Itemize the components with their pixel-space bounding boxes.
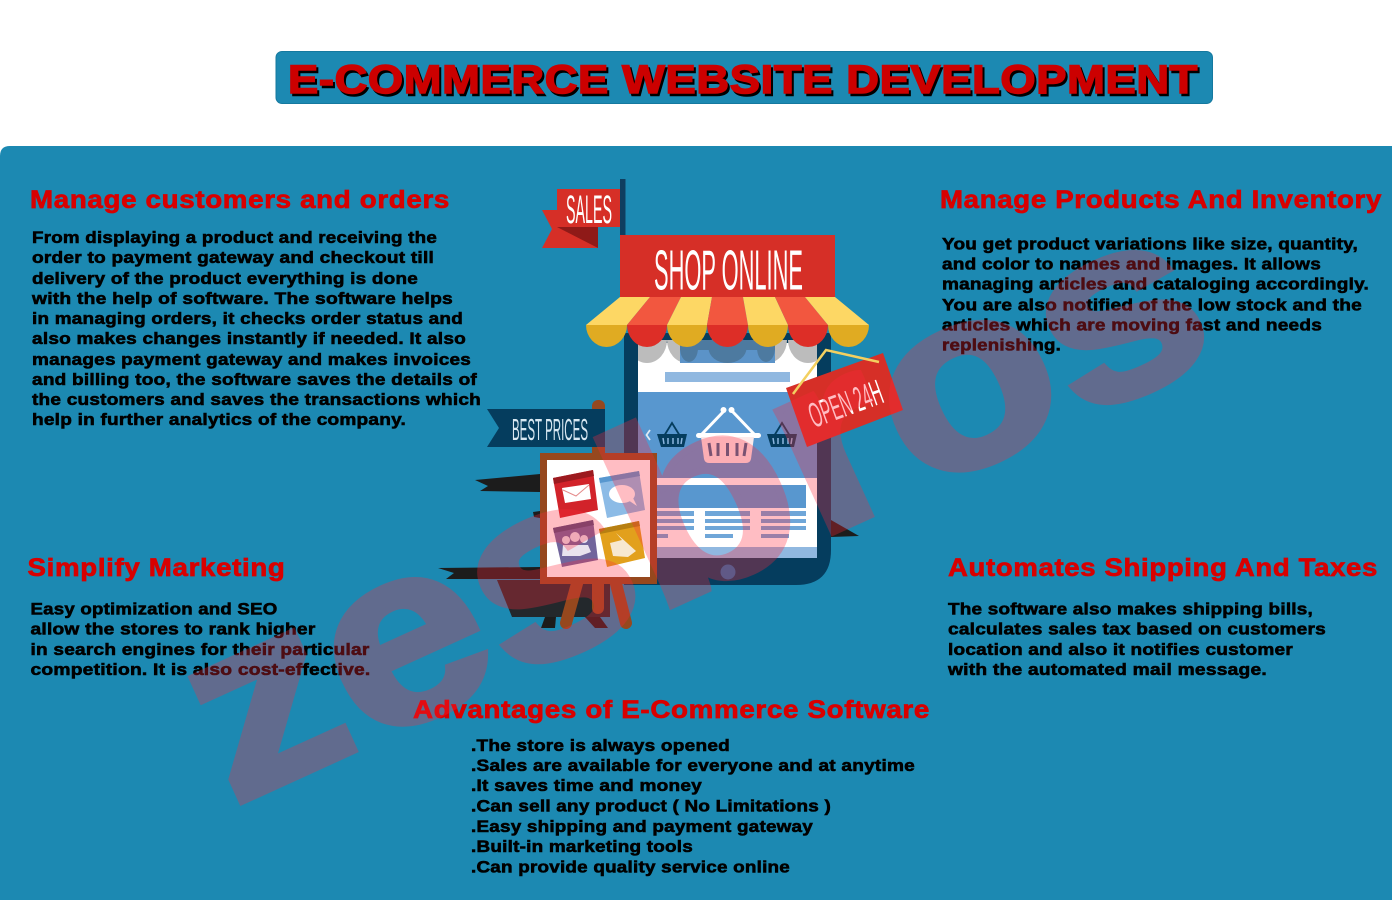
text block: advantages list [471, 736, 915, 876]
text block: simplify marketing: competition. It is also cost-effective. [30, 660, 370, 679]
text block: automates shipping: calculates sales tax based on customers [948, 620, 1326, 638]
text block: simplify marketing: Easy optimization and SEO [30, 600, 278, 618]
shadows and black ribbons [438, 474, 859, 628]
illustration: online shop: SHOP ONLINE [654, 238, 803, 302]
sign: open 24h [786, 350, 903, 447]
text block: advantages list: .Easy shipping and payment gateway [471, 817, 813, 836]
title banner: E-COMMERCE WEBSITE DEVELOPMENT [290, 60, 1200, 104]
panel: manage customers and orders [30, 186, 481, 429]
text block: advantages list: .Can sell any product ( No Limitations ) [471, 796, 831, 816]
text block: simplify marketing: in search engines for their particular [30, 640, 370, 659]
illustration: online shop [438, 179, 903, 628]
text block: advantages list: .The store is always opened [471, 736, 730, 755]
heading: manage customers: Manage customers and orders [30, 186, 450, 214]
text block: advantages list: .Sales are available for everyone and at anytime [471, 756, 915, 775]
flag: best prices [487, 400, 605, 460]
text block: manage customers: delivery of the product everything is done [32, 269, 418, 288]
text block: simplify marketing: allow the stores to rank higher [30, 620, 316, 638]
watermark: zesbros: zesbros [138, 147, 1246, 855]
sign: open 24h: OPEN 24H [803, 373, 888, 436]
icon: people note [553, 520, 598, 567]
text block: manage customers [31, 228, 481, 429]
sign: shop online [620, 235, 835, 302]
easel with notes [540, 453, 657, 623]
panel: manage products and inventory [940, 186, 1382, 354]
tablet [624, 317, 831, 585]
illustration: online shop: BEST PRICES [512, 412, 588, 447]
heading: advantages: Advantages of E-Commerce Software [413, 696, 930, 724]
awning [586, 297, 869, 347]
text block: automates shipping: with the automated mail message. [947, 660, 1267, 679]
icon: mail note [553, 470, 598, 518]
text block: manage products: articles which are moving fast and needs [942, 316, 1322, 334]
text block: manage products: You get product variations like size, quantity, [942, 234, 1358, 254]
text block: manage products: replenishing. [942, 336, 1061, 354]
title banner: E-COMMERCE WEBSITE DEVELOPMENT [288, 58, 1198, 102]
heading: manage products: Manage Products And Inventory [940, 186, 1382, 214]
text block: manage customers: the customers and saves the transactions which [32, 390, 481, 409]
text block: simplify marketing [30, 600, 370, 679]
text block: manage customers: with the help of software. The software helps [31, 289, 453, 308]
text block: manage customers: also makes changes instantly if needed. It also [32, 329, 466, 348]
text block: automates shipping: The software also makes shipping bills, [948, 600, 1313, 618]
panel: advantages of e-commerce software [413, 696, 930, 876]
text block: automates shipping [947, 600, 1326, 679]
text block: automates shipping: location and also it notifies customer [948, 640, 1293, 659]
text block: manage products: managing articles and cataloging accordingly. [942, 274, 1369, 294]
text block: manage customers: order to payment gateway and checkout till [32, 248, 434, 267]
illustration: online shop: SALES [566, 188, 612, 232]
heading: automates shipping: Automates Shipping And Taxes [948, 554, 1378, 582]
panel: automates shipping and taxes [947, 554, 1378, 679]
text block: advantages list: .Built-in marketing tools [471, 837, 693, 856]
icon: baskets on the screen [646, 407, 797, 463]
flag: sales [542, 179, 626, 248]
icon: thumbs up note [599, 521, 645, 567]
text block: advantages list: .It saves time and money [471, 776, 702, 795]
icon: chat note [599, 471, 645, 518]
text block: manage products: and color to names and images. It allows [942, 254, 1321, 274]
heading: simplify marketing: Simplify Marketing [28, 554, 286, 582]
text block: advantages list: .Can provide quality service online [471, 858, 790, 876]
text block: manage customers: help in further analytics of the company. [32, 410, 406, 429]
text block: manage customers: manages payment gateway and makes invoices [32, 350, 471, 369]
text block: manage customers: From displaying a product and receiving the [32, 228, 437, 247]
text block: manage customers: in managing orders, it checks order status and [32, 309, 463, 328]
text block: manage customers: and billing too, the software saves the details of [32, 370, 477, 389]
text block: manage products: You are also notified of the low stock and the [942, 296, 1362, 314]
text block: manage products [942, 234, 1369, 354]
panel: simplify marketing [28, 554, 370, 679]
